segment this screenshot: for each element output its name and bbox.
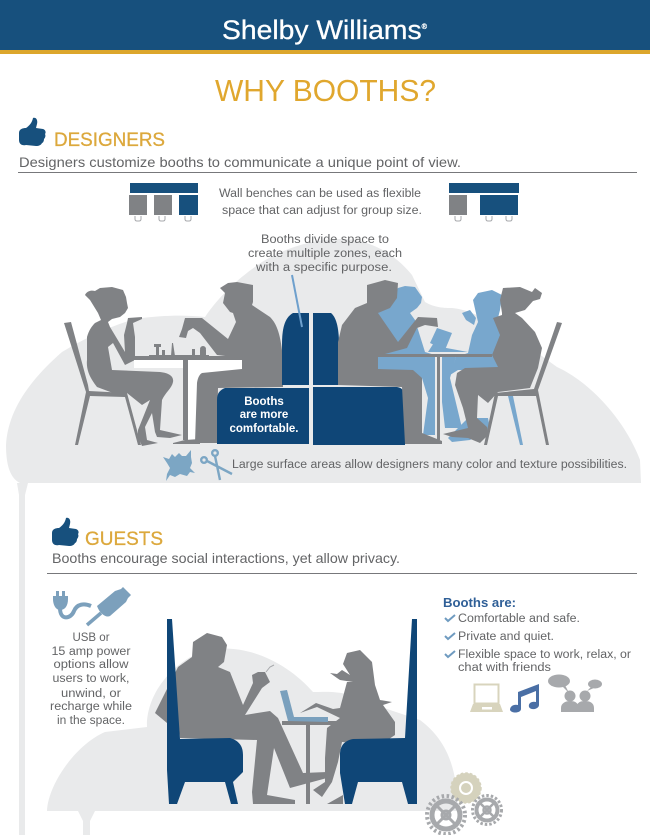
heading: designers: DESIGNERS [54,130,165,151]
booth: back to back benches [217,313,405,445]
icon: wall bench three seats [129,183,198,221]
icon: fabric swatch [163,450,195,481]
chair [64,322,141,445]
brand name: ® [422,23,428,31]
straw [266,665,274,672]
list: booths are [443,596,631,674]
table: guests [282,721,342,804]
icon: gears [427,774,502,834]
table: chess [133,343,242,444]
zones callout text: create multiple zones, each [248,248,402,260]
figure: right woman and chair [443,287,562,445]
list: booths are: Flexible space to work, relax, or [458,649,631,661]
icon: music note [510,684,539,713]
icon: scissors [201,450,232,480]
power options text: recharge while [50,701,132,713]
guests intro text: Booths encourage social interactions, yet allow privacy. [52,550,400,566]
power options text: 15 amp power [52,646,131,658]
icon: guests thumb [52,518,79,546]
chess pieces [149,343,209,357]
table: right [378,354,492,440]
power options text: users to work, [52,673,130,685]
zones callout text: Booths divide space to [261,234,389,246]
icon: laptop [470,684,503,712]
wall bench text: Wall benches can be used as flexible [219,188,421,200]
icon: people talking [548,674,602,712]
figure: blue couple [378,286,523,445]
wall bench text: space that can adjust for group size. [222,205,422,217]
designers intro text: Designers customize booths to communicate a unique point of view. [19,154,461,170]
booth: left guest bench [167,619,243,804]
icon: designers thumb [19,118,46,146]
brand name: Shelby Williams [222,15,413,45]
header banner [0,0,650,54]
icon: power plug and usb [53,587,131,625]
booth comfort label [229,396,299,435]
booth comfort label: comfortable. [229,423,299,435]
zones callout text: with a specific purpose. [255,262,392,274]
figure: left man [179,282,283,443]
figure: guest woman [300,650,395,804]
laptop [280,690,328,722]
booth comfort label: are more [240,409,288,421]
booth: right guest bench [340,619,417,804]
power options text: in the space. [57,715,125,727]
zones callout text [248,234,402,274]
list: booths are: Booths are: [443,596,516,610]
surface area text: Large surface areas allow designers many color and texture possibilities. [232,459,627,471]
icon: wall bench two groups [449,183,519,221]
list: booths are: Comfortable and safe. [458,613,580,625]
power options text: unwind, or [61,688,121,700]
panel: guests background cloud [47,648,458,835]
heading: guests: GUESTS [85,529,163,550]
power options text [50,632,132,727]
power options text: USB or [72,632,110,644]
power options text: options allow [54,659,129,671]
panel: designers background cloud [6,239,641,835]
figure: right man [338,280,442,444]
title: WHY BOOTHS? [215,73,436,108]
list: booths are: chat with friends [458,662,551,674]
booth comfort label: Booths [244,396,284,408]
wall bench text [219,188,422,217]
connector bar [19,500,25,835]
list: booths are: Private and quiet. [458,631,554,643]
callout line [292,275,302,327]
woman [85,287,182,446]
figure: left woman and chair playing chess [64,287,182,446]
figure: guest man [155,633,327,804]
